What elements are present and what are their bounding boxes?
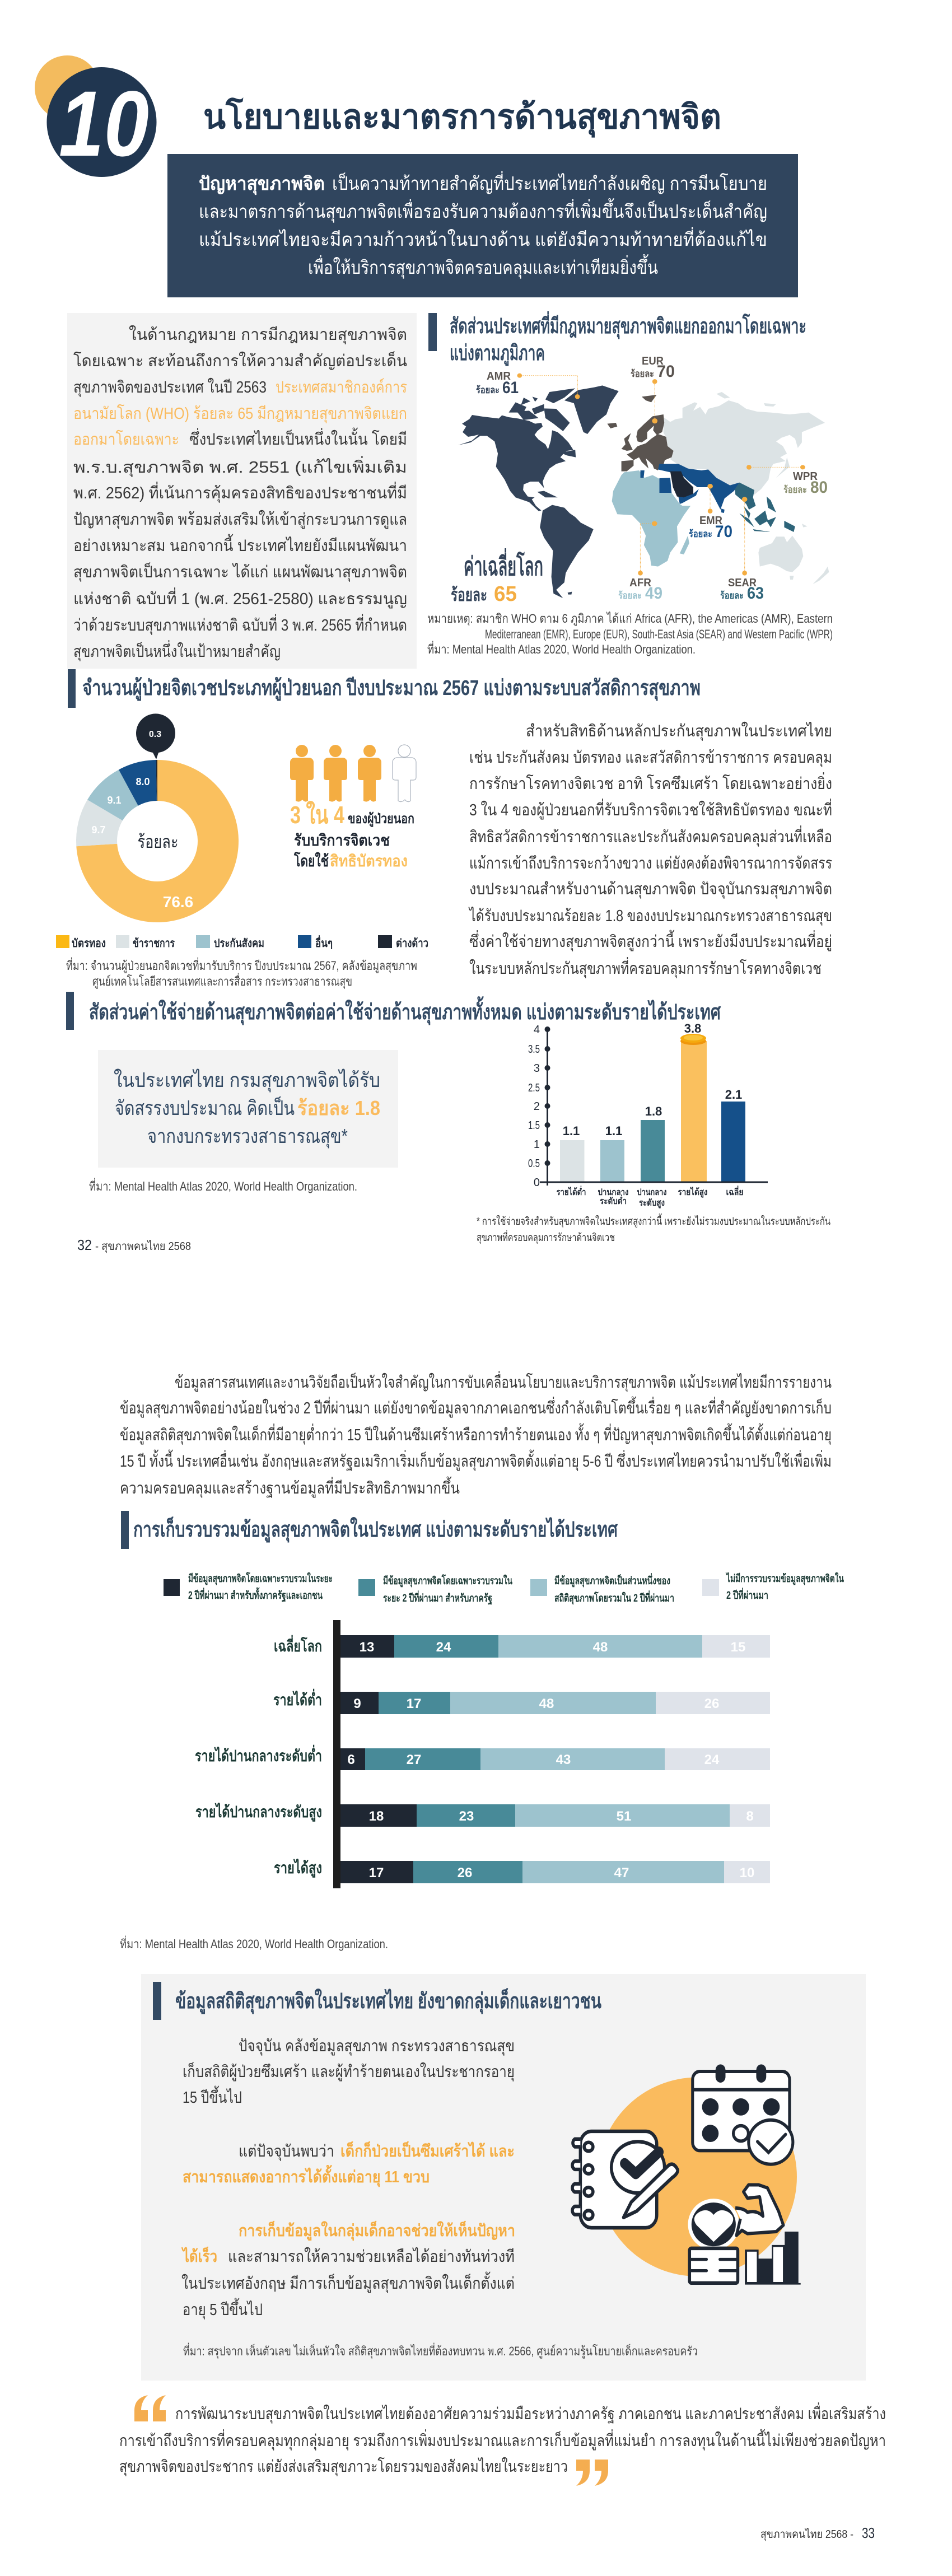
title: นโยบายและมาตรการด้านสุขภาพจิต xyxy=(203,97,721,138)
chart footnote: * การใช้จ่ายจริงสำหรับสุขภาพจิตในประเทศสูงกว่านี้ เพราะยังไม่รวมงบประมาณในระบบหลักประกัน xyxy=(477,1214,830,1228)
callout: 3 in 4 outpatients use gold card: 3 ใน 4 xyxy=(290,800,344,829)
panel text: และสามารถให้ความช่วยเหลือได้อย่างทันท่วงที xyxy=(228,2247,515,2266)
panel: mental health law text: ประเทศสมาชิกองค์การ xyxy=(276,378,407,396)
stacked chart legend: ไม่มีการรวบรวมข้อมูลสุขภาพจิตใน xyxy=(726,1572,844,1585)
donut legend: อื่นๆ xyxy=(315,935,333,950)
icon: four people, three filled xyxy=(290,745,416,802)
page number 33: สุขภาพคนไทย 2568 - xyxy=(760,2528,853,2541)
text block: welfare schemes: การรักษาโรคทางจิตเวช อาทิ โรคซึมเศร้า โดยเฉพาะอย่างยิ่ง xyxy=(469,772,832,793)
intro banner: แม้ประเทศไทยจะมีความก้าวหน้าในบางด้าน แต่ยังมีความท้าทายที่ต้องแก้ไข xyxy=(199,227,767,250)
map label: WPR: 80 xyxy=(810,478,828,497)
map label: AFR: ร้อยละ xyxy=(618,590,642,601)
axes: 1.5 xyxy=(528,1119,540,1132)
map label: AFR xyxy=(618,577,662,603)
row: world average: 48 xyxy=(593,1640,608,1655)
panel: mental health law text: พ.ศ. 2562) ที่เน้นการคุ้มครองสิทธิของประชาชนที่มี xyxy=(73,482,407,503)
text block: welfare schemes: ในระบบหลักประกันสุขภาพที่ครอบคลุมการรักษาโรคทางจิตเวช xyxy=(469,957,822,978)
text block: welfare schemes: งบประมาณสำหรับงานด้านสุขภาพจิต ปัจจุบันกรมสุขภาพจิต xyxy=(469,880,832,899)
panel: mental health law text xyxy=(67,313,417,669)
map label: AMR: AMR xyxy=(487,370,511,382)
category labels: ปานกลาง xyxy=(637,1188,666,1197)
axes: 2 xyxy=(534,1100,540,1113)
map label: AMR xyxy=(476,370,519,397)
donut source xyxy=(66,957,417,989)
panel text xyxy=(181,2037,515,2320)
closing remark text: สุขภาพจิตของประชากร แต่ยังส่งเสริมสุขภาวะโดยรวมของสังคมไทยในระยะยาว xyxy=(119,2457,568,2476)
text block: welfare schemes: เช่น ประกันสังคม บัตรทอง และสวัสดิการข้าราชการ ครอบคลุม xyxy=(469,749,832,767)
text block: welfare schemes: แม้การเข้าถึงบริการจะกว้างขวาง แต่ยังคงต้องพิจารณาการจัดสรร xyxy=(469,855,832,872)
axes: 4 xyxy=(534,1024,540,1036)
icon: bar graph xyxy=(745,2232,801,2285)
category labels: เฉลี่ย xyxy=(726,1186,744,1197)
panel: mental health law text: พ.ร.บ.สุขภาพจิต พ.ศ. 2551 (แก้ไขเพิ่มเติม xyxy=(73,456,407,477)
map label: WPR xyxy=(783,470,828,497)
callout: Thailand 1.8 percent: ในประเทศไทย กรมสุขภาพจิตได้รับ xyxy=(114,1068,380,1093)
chapter number badge xyxy=(35,55,157,177)
page number 32 xyxy=(77,1236,191,1253)
donut chart: ร้อยละ xyxy=(138,832,178,852)
panel: mental health law text: สุขภาพจิตเป็นหนึ่งในเป้าหมายสำคัญ xyxy=(73,640,281,661)
row: low income: 17 xyxy=(407,1696,421,1711)
map label: WPR: WPR xyxy=(793,470,818,483)
row: world average xyxy=(274,1635,770,1658)
chart footnote xyxy=(477,1214,830,1244)
row: upper middle income: 23 xyxy=(459,1809,474,1824)
text block: welfare schemes: 3 ใน 4 ของผู้ป่วยนอกที่รับบริการจิตเวชใช้สิทธิบัตรทอง ขณะที่ xyxy=(469,799,832,820)
row: upper middle income: 18 xyxy=(369,1809,384,1824)
map region: Saudi Arabia xyxy=(670,472,693,497)
intro banner: เพื่อให้บริการสุขภาพจิตครอบคลุมและเท่าเทียมยิ่งขึ้น xyxy=(308,254,658,279)
axes: 0.5 xyxy=(528,1158,540,1170)
callout: 3 in 4 outpatients use gold card: ของผู้ป่วยนอก xyxy=(348,811,414,827)
icon: coin stack xyxy=(680,1034,706,1045)
category labels xyxy=(557,1186,744,1209)
map label: EUR: 70 xyxy=(657,362,675,381)
category labels: ระดับสูง xyxy=(639,1198,665,1209)
panel: mental health law text: ว่าด้วยระบบสุขภาพแห่งชาติ ฉบับที่ 3 พ.ศ. 2565 ที่กำหนด xyxy=(73,614,407,635)
page number 33: 33 xyxy=(862,2524,875,2541)
panel: children and youth data gap xyxy=(141,1974,866,2381)
icon: notebook with check and pen xyxy=(572,2131,678,2228)
map region: Eastern Mediterranean xyxy=(641,464,739,513)
panel heading xyxy=(153,1982,601,2020)
row: low income xyxy=(273,1688,770,1714)
map label: SEAR: SEAR xyxy=(728,577,757,589)
map label: EMR: EMR xyxy=(699,515,723,527)
page number 33 xyxy=(760,2524,875,2541)
row: high income: 17 xyxy=(369,1865,384,1880)
value labels: 2.1 xyxy=(725,1088,742,1102)
row: low income: รายได้ต่ำ xyxy=(273,1688,322,1709)
heading: data collection by income xyxy=(121,1511,618,1549)
map label: EMR: ร้อยละ xyxy=(689,529,712,539)
map callout: world average: ร้อยละ xyxy=(451,585,487,605)
donut legend: ต่างด้าว xyxy=(396,937,428,950)
text block: welfare schemes: ได้รับงบประมาณร้อยละ 1.8 ของงบประมาณกระทรวงสาธารณสุข xyxy=(468,906,832,926)
heading: mental health spending by income: สัดส่วนค่าใช้จ่ายด้านสุขภาพจิตต่อค่าใช้จ่ายด้านสุขภาพทั้งหมด แบ่งตามระดับรายได้ประเทศ xyxy=(89,996,721,1025)
map region: Americas xyxy=(458,385,619,598)
panel text: เด็กก็ป่วยเป็นซึมเศร้าได้ และ xyxy=(340,2141,515,2160)
panel: mental health law text: ปัญหาสุขภาพจิต พร้อมส่งเสริมให้เข้าสู่กระบวนการดูแล xyxy=(73,510,407,529)
row: high income: 47 xyxy=(614,1865,629,1880)
map label: AMR: 61 xyxy=(502,379,519,397)
panel text: เก็บสถิติผู้ป่วยซึมเศร้า และผู้ทำร้ายตนเองในประชากรอายุ xyxy=(183,2061,515,2082)
panel: mental health law text: ในด้านกฎหมาย การมีกฎหมายสุขภาพจิต xyxy=(129,325,407,344)
map label: SEAR: ร้อยละ xyxy=(720,590,744,601)
donut chart xyxy=(76,760,239,922)
map label: SEAR: 63 xyxy=(747,584,764,603)
map label: AFR: AFR xyxy=(629,577,652,589)
panel source: ที่มา: สรุปจาก เห็นตัวเลข ไม่เห็นหัวใจ สถิติสุขภาพจิตไทยที่ต้องทบทวน พ.ศ. 2566, ศูนย์ความรู้นโยบายเด็กและครอบครัว xyxy=(183,2342,698,2359)
page number 32: 32 xyxy=(77,1236,92,1253)
map region: Europe xyxy=(607,395,674,472)
stacked chart legend: สถิติสุขภาพโดยรวมใน 2 ปีที่ผ่านมา xyxy=(554,1590,674,1605)
panel: mental health law text: แห่งชาติ ฉบับที่ 1 (พ.ศ. 2561-2580) และธรรมนูญ xyxy=(73,587,407,609)
intro banner: เป็นความท้าทายสำคัญที่ประเทศไทยกำลังเผชิญ การมีนโยบาย xyxy=(332,171,767,194)
panel text: การเก็บข้อมูลในกลุ่มเด็กอาจช่วยให้เห็นปัญหา xyxy=(239,2220,515,2241)
axes: 3 xyxy=(534,1062,540,1075)
axes: 1 xyxy=(534,1138,540,1151)
donut legend xyxy=(56,935,428,950)
callout source: ที่มา: Mental Health Atlas 2020, World Health Organization. xyxy=(89,1178,357,1193)
row: low income: 26 xyxy=(704,1696,719,1711)
chart footnote: สุขภาพที่ครอบคลุมการรักษาด้านจิตเวช xyxy=(477,1230,615,1244)
callout: Thailand 1.8 percent: จัดสรรงบประมาณ คิดเป็น xyxy=(115,1095,295,1119)
row: world average: เฉลี่ยโลก xyxy=(274,1635,322,1655)
intro banner xyxy=(167,154,798,297)
map callout: world average xyxy=(451,548,543,606)
intro banner: และมาตรการด้านสุขภาพจิตเพื่อรองรับความต้องการที่เพิ่มขึ้นจึงเป็นประเด็นสำคัญ xyxy=(199,198,767,223)
row: lower middle income xyxy=(195,1744,770,1770)
axes xyxy=(528,1024,768,1189)
panel heading: ข้อมูลสถิติสุขภาพจิตในประเทศไทย ยังขาดกลุ่มเด็กและเยาวชน xyxy=(175,1988,601,2014)
axes: 3.5 xyxy=(528,1043,540,1056)
stacked chart legend: มีข้อมูลสุขภาพจิตโดยเฉพาะรวบรวมในระยะ xyxy=(188,1572,333,1585)
category labels: รายได้สูง xyxy=(678,1187,708,1198)
panel text: 15 ปีขึ้นไป xyxy=(183,2085,242,2107)
row: world average: 15 xyxy=(731,1640,745,1655)
category labels: ปานกลาง xyxy=(598,1188,628,1197)
world map xyxy=(458,374,829,598)
row: upper middle income xyxy=(195,1803,770,1827)
row: lower middle income: รายได้ปานกลางระดับต่ำ xyxy=(195,1744,322,1765)
map region: South-East Asia xyxy=(735,483,795,532)
row: world average: 24 xyxy=(436,1640,451,1655)
row: lower middle income: 6 xyxy=(347,1752,355,1767)
stacked chart legend: มีข้อมูลสุขภาพจิตเป็นส่วนหนึ่งของ xyxy=(554,1573,670,1588)
heading: outpatients by welfare scheme: จำนวนผู้ป่วยจิตเวชประเภทผู้ป่วยนอก ปีงบประมาณ 2567 แบ่งตามระบบสวัสดิการสุขภาพ xyxy=(82,676,701,701)
bar chart: spending share xyxy=(528,1021,768,1209)
map label: EUR: EUR xyxy=(642,355,664,367)
donut source: ที่มา: จำนวนผู้ป่วยนอกจิตเวชที่มารับบริการ ปีงบประมาณ 2567, คลังข้อมูลสุขภาพ xyxy=(66,957,417,973)
closing remark text xyxy=(119,2402,886,2476)
icon: heart on document xyxy=(688,2199,739,2283)
row: lower middle income: 27 xyxy=(407,1752,421,1767)
callout: Thailand 1.8 percent: ร้อยละ 1.8 xyxy=(297,1096,380,1119)
panel text: ในประเทศอังกฤษ มีการเก็บข้อมูลสุขภาพจิตในเด็กตั้งแต่ xyxy=(181,2271,515,2293)
panel: mental health law text: ซึ่งประเทศไทยเป็นหนึ่งในนั้น โดยมี xyxy=(189,427,407,449)
row: upper middle income: 8 xyxy=(746,1809,754,1824)
donut source: ศูนย์เทคโนโลยีสารสนเทศและการสื่อสาร กระทรวงสาธารณสุข xyxy=(92,973,352,989)
text block: welfare schemes: ซึ่งค่าใช้จ่ายทางสุขภาพจิตสูงกว่านี้ เพราะยังมีงบประมาณที่อยู่ xyxy=(469,930,832,951)
stacked chart legend: 2 ปีที่ผ่านมา xyxy=(726,1588,768,1602)
callout: Thailand 1.8 percent: จากงบกระทรวงสาธารณสุข* xyxy=(147,1124,348,1149)
row: low income: 48 xyxy=(539,1696,554,1711)
donut chart: 9.7 xyxy=(91,824,106,836)
axes: 2.5 xyxy=(528,1082,540,1094)
donut chart: 9.1 xyxy=(107,795,122,806)
value labels: 1.8 xyxy=(645,1104,662,1118)
panel: mental health law text: สุขภาพจิตเป็นการเฉพาะ ได้แก่ แผนพัฒนาสุขภาพจิต xyxy=(73,562,407,582)
donut legend: บัตรทอง xyxy=(72,937,106,950)
row: lower middle income: 43 xyxy=(556,1752,571,1767)
stacked chart legend: 2 ปีที่ผ่านมา สำหรับทั้งภาครัฐและเอกชน xyxy=(188,1587,323,1603)
donut legend: ข้าราชการ xyxy=(133,937,175,950)
map callout: world average: ค่าเฉลี่ยโลก xyxy=(464,548,543,581)
value labels: 1.1 xyxy=(605,1124,622,1138)
text block: welfare schemes xyxy=(468,721,832,978)
row: lower middle income: 24 xyxy=(704,1752,720,1767)
stacked chart legend: ระยะ 2 ปีที่ผ่านมา สำหรับภาครัฐ xyxy=(383,1590,492,1606)
text block: welfare schemes: สิทธิสวัสดิการข้าราชการและประกันสังคมครอบคลุมส่วนที่เหลือ xyxy=(469,825,832,847)
callout: 3 in 4 outpatients use gold card: รับบริการจิตเวช xyxy=(294,832,390,849)
category labels: ระดับต่ำ xyxy=(600,1194,627,1206)
row: high income: รายได้สูง xyxy=(274,1859,322,1878)
panel text: อายุ 5 ปีขึ้นไป xyxy=(183,2298,263,2320)
callout bubble: 0.3: 0.3 xyxy=(149,730,161,739)
heading: outpatients by welfare scheme xyxy=(68,669,701,708)
text block: data and research: ความครอบคลุมและสร้างฐานข้อมูลที่มีประสิทธิภาพมากขึ้น xyxy=(120,1476,460,1498)
map note and source xyxy=(427,612,833,656)
callout: 3 in 4 outpatients use gold card: สิทธิบัตรทอง xyxy=(330,852,408,870)
callout bubble: 0.3 xyxy=(136,713,175,759)
heading: share of countries with law: แบ่งตามภูมิภาค xyxy=(450,342,545,366)
callout: 3 in 4 outpatients use gold card: โดยใช้ xyxy=(293,851,329,870)
bars xyxy=(560,1041,745,1182)
map label: EMR: 70 xyxy=(715,522,732,541)
panel text: แต่ปัจจุบันพบว่า xyxy=(239,2143,334,2161)
map marker dots xyxy=(517,374,805,576)
row: high income xyxy=(274,1859,770,1883)
intro banner: ปัญหาสุขภาพจิต xyxy=(199,173,325,195)
icon: closing quote xyxy=(576,2460,608,2486)
panel: mental health law text: โดยเฉพาะ สะท้อนถึงการให้ความสำคัญต่อประเด็น xyxy=(73,351,407,370)
map leader lines xyxy=(520,376,802,573)
heading: share of countries with law xyxy=(428,311,806,366)
panel: mental health law text: อนามัยโลก (WHO) ร้อยละ 65 มีกฎหมายสุขภาพจิตแยก xyxy=(73,404,407,423)
row: high income: 26 xyxy=(458,1865,472,1880)
icon: opening quote xyxy=(134,2395,166,2421)
callout: 3 in 4 outpatients use gold card xyxy=(290,800,414,870)
stacked chart source: ที่มา: Mental Health Atlas 2020, World Health Organization. xyxy=(120,1935,388,1951)
donut chart: 76.6 xyxy=(163,893,193,911)
text block: data and research xyxy=(120,1371,832,1498)
panel: mental health law text: ออกมาโดยเฉพาะ xyxy=(73,430,179,449)
stacked chart legend xyxy=(164,1572,844,1606)
row: upper middle income: 51 xyxy=(617,1809,631,1824)
row: high income: 10 xyxy=(740,1865,754,1880)
donut legend: ประกันสังคม xyxy=(214,937,264,950)
category labels: รายได้ต่ำ xyxy=(557,1186,586,1197)
map label: EUR: ร้อยละ xyxy=(631,368,654,379)
text block: welfare schemes: สำหรับสิทธิด้านหลักประกันสุขภาพในประเทศไทย xyxy=(526,721,832,741)
map label: EMR xyxy=(689,515,732,541)
row: world average: 13 xyxy=(360,1640,374,1655)
heading: mental health spending by income xyxy=(66,992,721,1030)
panel: mental health law text: อย่างเหมาะสม นอกจากนี้ ประเทศไทยยังมีแผนพัฒนา xyxy=(73,534,407,555)
map label: EUR xyxy=(631,355,675,381)
value labels xyxy=(563,1021,742,1138)
callout: Thailand 1.8 percent xyxy=(98,1050,398,1168)
map label: AFR: 49 xyxy=(645,584,662,603)
panel text: สามารถแสดงอาการได้ตั้งแต่อายุ 11 ขวบ xyxy=(183,2164,430,2187)
illustration: health records xyxy=(572,2066,801,2285)
row: low income: 9 xyxy=(353,1696,361,1711)
panel: mental health law text: สุขภาพจิตของประเทศ ในปี 2563 xyxy=(73,377,267,397)
panel text: ได้เร็ว xyxy=(181,2246,217,2266)
value labels: 1.1 xyxy=(563,1124,580,1138)
map note and source: หมายเหตุ: สมาชิก WHO ตาม 6 ภูมิภาค ได้แก่ Africa (AFR), the Americas (AMR), Eastern xyxy=(427,612,833,626)
map region: Africa xyxy=(612,470,690,567)
icon: flexed arm xyxy=(735,2185,783,2236)
map label: WPR: ร้อยละ xyxy=(783,484,807,495)
panel text: ปัจจุบัน คลังข้อมูลสุขภาพ กระทรวงสาธารณสุข xyxy=(239,2037,515,2056)
value labels: 3.8 xyxy=(684,1021,701,1035)
heading: data collection by income: การเก็บรวบรวมข้อมูลสุขภาพจิตในประเทศ แบ่งตามระดับรายได้ประเทศ xyxy=(133,1516,618,1543)
chapter number badge: 10 xyxy=(59,72,149,176)
donut chart: 8.0 xyxy=(136,776,150,787)
map note and source: ที่มา: Mental Health Atlas 2020, World Health Organization. xyxy=(427,641,696,656)
stacked chart legend: มีข้อมูลสุขภาพจิตโดยเฉพาะรวบรวมใน xyxy=(383,1574,512,1588)
map region: Western Pacific xyxy=(664,392,829,584)
map label: SEAR xyxy=(720,577,764,603)
page number 32: - สุขภาพคนไทย 2568 xyxy=(95,1240,191,1253)
map callout: world average: 65 xyxy=(494,582,517,606)
map label: AMR: ร้อยละ xyxy=(476,385,500,395)
row: upper middle income: รายได้ปานกลางระดับสูง xyxy=(195,1803,322,1822)
icon: calendar xyxy=(693,2066,793,2164)
stacked bar chart xyxy=(195,1620,770,1888)
axes: 0 xyxy=(534,1177,540,1189)
